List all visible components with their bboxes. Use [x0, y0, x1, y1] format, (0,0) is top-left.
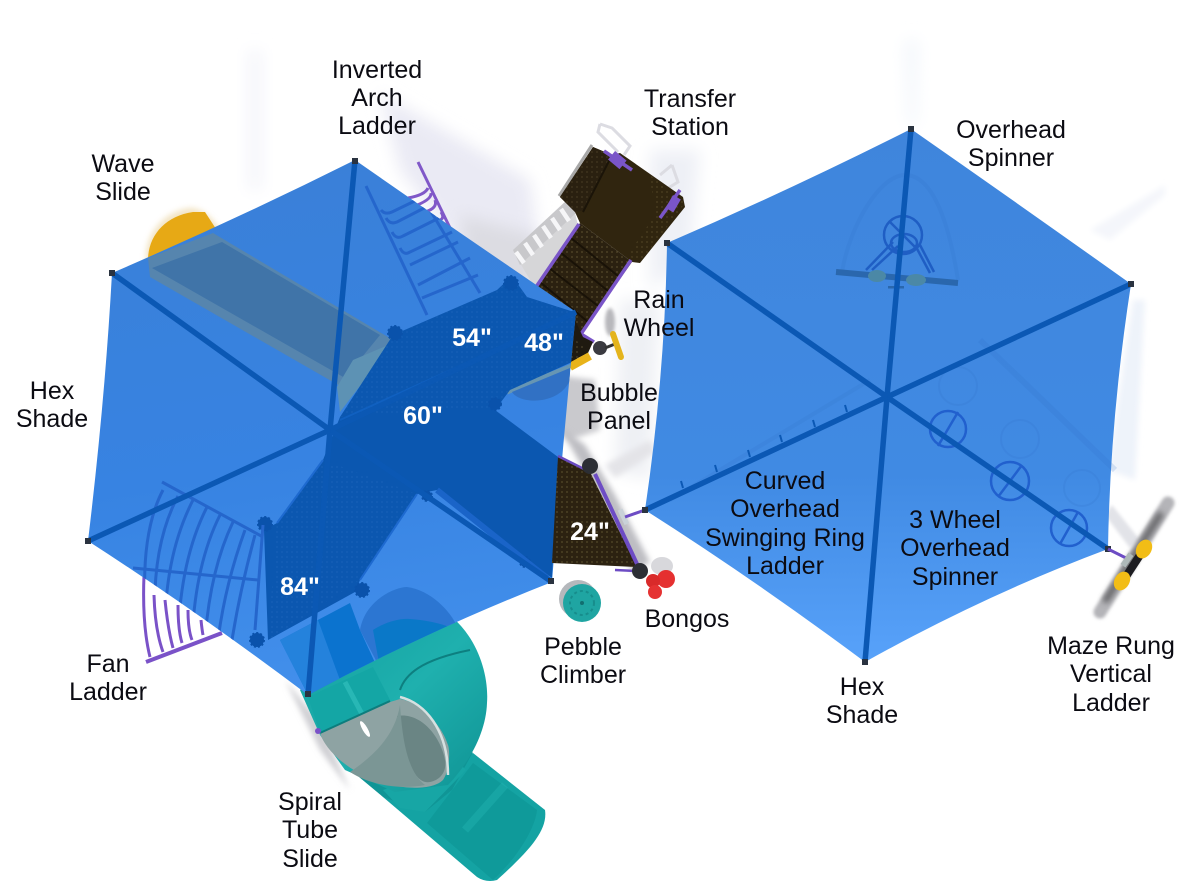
overhead spinner: [866, 216, 934, 273]
curved ring ladder ticks: [681, 405, 847, 488]
label: Curved Overhead Swinging Ring Ladder: Overhead: [730, 495, 840, 523]
label: Maze Rung Vertical Ladder: Vertical: [1070, 660, 1152, 688]
label: Wave Slide: Slide: [95, 178, 151, 206]
equipment: fan ladder: [144, 575, 222, 662]
icon: maze rung vertical ladder: [1100, 503, 1168, 612]
posts: [250, 276, 530, 647]
wave slide seen through shade: [148, 233, 393, 390]
label: Fan Ladder: Ladder: [69, 678, 147, 706]
fan ladder through shade: [133, 482, 263, 640]
3 wheel overhead spinner: [930, 411, 1087, 546]
label: Wave Slide: Wave: [92, 150, 154, 178]
label: Inverted Arch Ladder: Inverted: [332, 56, 422, 84]
label: Transfer Station: Station: [651, 113, 729, 141]
label: Hex Shade left: Hex: [30, 377, 75, 405]
label: Spiral Tube Slide: Tube: [282, 816, 338, 844]
equipment: rain wheel: [570, 320, 621, 367]
label: Hex Shade right: Hex: [840, 673, 885, 701]
equipment: spiral tube slide: [300, 618, 545, 881]
label: 3 Wheel Overhead Spinner: Spinner: [912, 563, 998, 591]
equipment: wave slide: [146, 208, 222, 278]
shade beams: [645, 129, 1131, 662]
label: Hex Shade right: Shade: [826, 701, 898, 729]
shade beams: [88, 160, 576, 695]
label: Rain Wheel: Rain: [633, 286, 685, 314]
overhead spinner handle bar: [836, 270, 958, 288]
deck height: 24 inches: 24": [570, 518, 610, 546]
label: Spiral Tube Slide: Spiral: [278, 788, 342, 816]
deck height: 84 inches: 84": [280, 573, 320, 601]
label: Curved Overhead Swinging Ring Ladder: Swinging Ring: [705, 524, 865, 552]
label: Bubble Panel: Bubble: [580, 379, 658, 407]
rain wheel slide seen through shade: [507, 366, 572, 392]
ground shadows: [248, 40, 1165, 790]
label: Rain Wheel: Wheel: [624, 314, 694, 342]
label: Transfer Station: Transfer: [644, 85, 736, 113]
label: Bubble Panel: Panel: [587, 407, 651, 435]
deck mesh texture: [340, 276, 577, 417]
label: Inverted Arch Ladder: Arch: [351, 84, 403, 112]
label: 3 Wheel Overhead Spinner: Overhead: [900, 534, 1010, 562]
equipment: inverted arch ladder rails: [408, 162, 452, 232]
deck height: 60 inches: 60": [403, 402, 443, 430]
beam end caps: [642, 126, 1134, 665]
label: Curved Overhead Swinging Ring Ladder: Curved: [745, 467, 825, 495]
deck height: 48 inches: 48": [524, 329, 564, 357]
deck platforms: [264, 276, 577, 640]
icon: bongos: [646, 557, 675, 599]
panel: left hex shade: [85, 158, 577, 697]
label: Pebble Climber: Pebble: [544, 633, 622, 661]
shade see-through details: [133, 186, 577, 695]
label: Overhead Spinner: Spinner: [968, 144, 1054, 172]
curved ladder and wheel shadows on shade: [670, 175, 1115, 506]
label: Pebble Climber: Climber: [540, 661, 626, 689]
label: Bongos: Bongos: [645, 605, 729, 633]
label: Maze Rung Vertical Ladder: Ladder: [1072, 689, 1150, 717]
label: Spiral Tube Slide: Slide: [282, 845, 338, 873]
label: Hex Shade left: Shade: [16, 405, 88, 433]
spiral slide seen through shade: [360, 587, 455, 660]
support rails: [437, 490, 547, 578]
label: Curved Overhead Swinging Ring Ladder: Ladder: [746, 552, 824, 580]
equipment: bubble panel and 24 inch deck: [552, 456, 648, 579]
inverted arch ladder through shade: [366, 186, 480, 315]
label: Fan Ladder: Fan: [86, 650, 130, 678]
deck height: 54 inches: 54": [452, 324, 492, 352]
equipment: transfer station: [513, 124, 685, 365]
label: Overhead Spinner: Overhead: [956, 116, 1066, 144]
icon: pebble climber: [559, 580, 601, 622]
label: Inverted Arch Ladder: Ladder: [338, 112, 416, 140]
label: Maze Rung Vertical Ladder: Maze Rung: [1047, 632, 1175, 660]
beam end caps: [85, 158, 554, 697]
panel: right hex shade: [642, 126, 1134, 665]
label: 3 Wheel Overhead Spinner: 3 Wheel: [909, 506, 1001, 534]
